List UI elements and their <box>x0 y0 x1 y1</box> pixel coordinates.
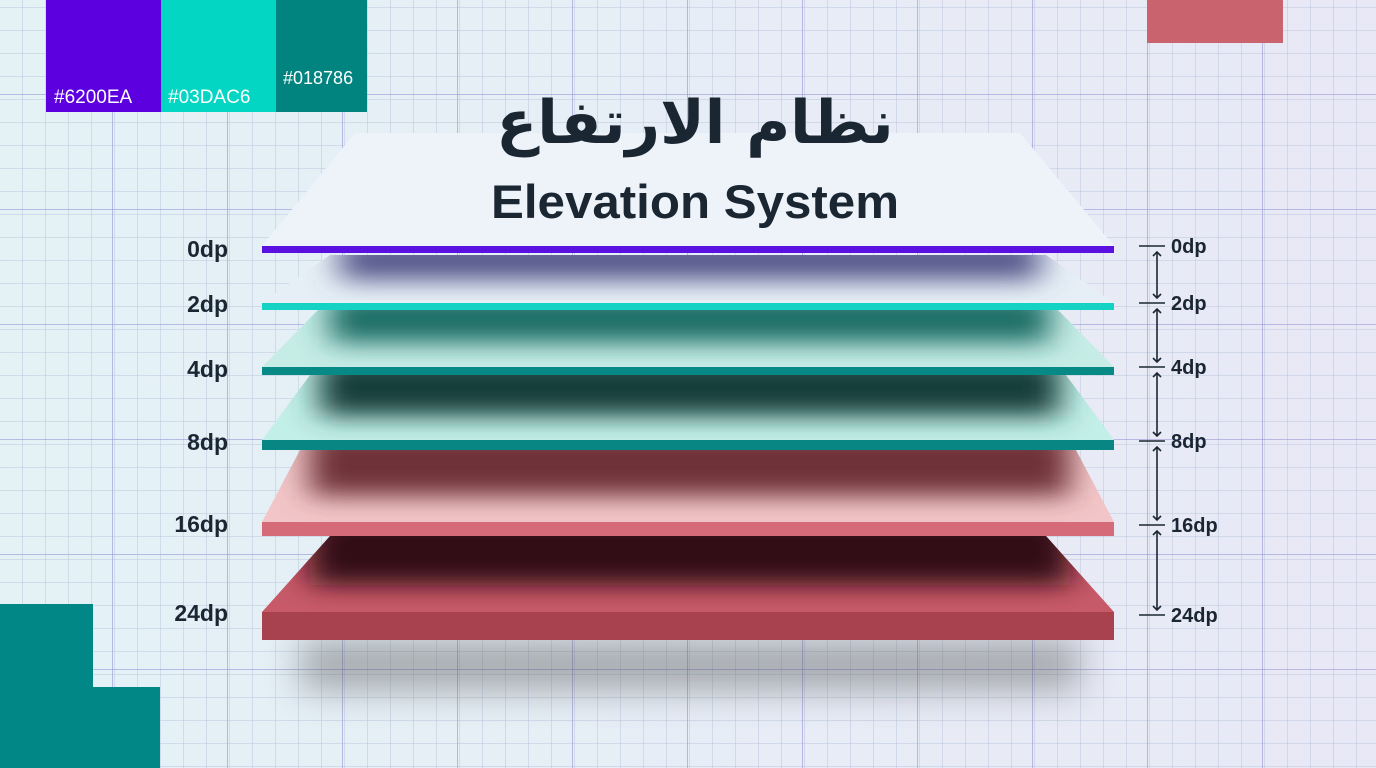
shadow under stack <box>300 640 1080 690</box>
decorative block: top-right pink <box>1147 0 1283 43</box>
left labels <box>174 236 228 626</box>
right scale labels: 0dp <box>1171 236 1207 258</box>
layer 8dp <box>262 375 1114 450</box>
swatch: #03DAC6: #03DAC6 <box>168 87 250 108</box>
swatch: #018786 <box>276 0 367 112</box>
title <box>491 88 899 228</box>
swatch: #6200EA <box>46 0 161 112</box>
layer 4dp <box>262 310 1114 375</box>
left labels: 4dp <box>187 356 228 382</box>
left labels: 2dp <box>187 291 228 317</box>
right scale labels: 24dp <box>1171 605 1218 627</box>
swatch: #018786: #018786 <box>283 68 353 88</box>
layer 16dp <box>262 450 1114 536</box>
right scale labels: 8dp <box>1171 431 1207 453</box>
swatch: #6200EA: #6200EA <box>54 87 133 108</box>
left labels: 24dp <box>174 600 228 626</box>
left labels: 16dp <box>174 511 228 537</box>
right scale labels: 2dp <box>1171 293 1207 315</box>
decorative block: bottom-left teal <box>0 604 160 768</box>
right scale labels <box>1171 236 1218 627</box>
color swatches <box>46 0 367 112</box>
title arabic: نظام الارتفاع <box>496 88 894 158</box>
right scale <box>1139 246 1165 615</box>
left labels: 0dp <box>187 236 228 262</box>
swatch: #03DAC6 <box>161 0 276 112</box>
layer 0dp <box>262 133 1114 253</box>
title english: Elevation System <box>491 175 899 228</box>
layer 2dp <box>262 255 1114 310</box>
right scale labels: 4dp <box>1171 357 1207 379</box>
left labels: 8dp <box>187 429 228 455</box>
layer 24dp <box>262 536 1114 640</box>
right scale labels: 16dp <box>1171 515 1218 537</box>
